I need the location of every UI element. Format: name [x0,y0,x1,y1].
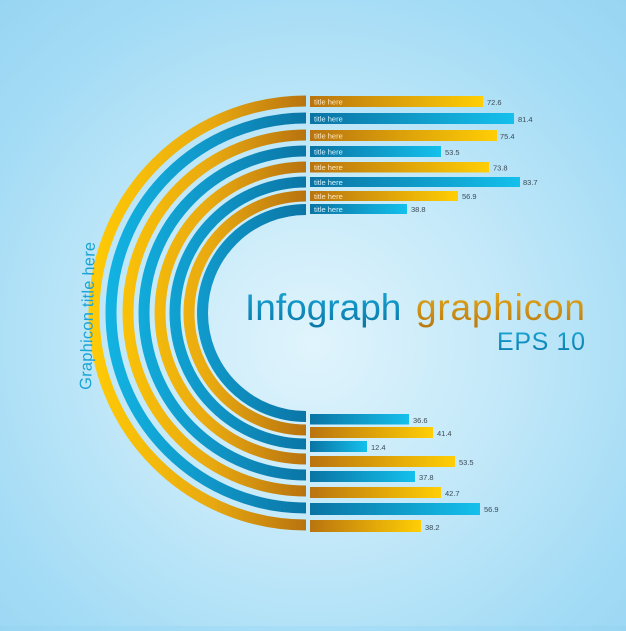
top bar chart: 53.5 [445,148,460,157]
bottom bar chart: 37.8 [419,473,434,482]
top bar chart: 73.8 [493,164,508,172]
C-shaped arcs [94,101,306,525]
bottom bar chart: 41.4 [437,429,452,438]
bottom bar chart: 36.6 [413,416,428,425]
top bar chart: title here [314,132,343,140]
top bar chart: 38.8 [411,205,426,214]
bottom bar chart: 42.7 [445,489,460,498]
top bar chart: title here [314,192,343,201]
bottom bar chart [310,414,499,532]
bottom bar chart: 53.5 [459,458,474,467]
bottom bar chart: 12.4 [371,443,386,452]
top bar chart: title here [314,205,343,214]
top bar chart: title here [314,163,343,172]
main title [245,287,585,328]
top bar chart [310,96,538,214]
side title: Graphicon title here [77,242,99,390]
top bar chart: title here [314,148,343,156]
top bar chart: 56.9 [462,192,477,201]
top bar chart: 75.4 [500,132,515,141]
top bar chart: 81.4 [518,115,533,124]
bottom bar chart: 56.9 [484,505,499,514]
top bar chart: title here [314,178,343,187]
bottom bar chart: 38.2 [425,523,440,532]
subtitle EPS 10: EPS 10 [497,328,585,356]
top bar chart: 72.6 [487,98,502,107]
main title: Infograph [245,287,401,328]
top bar chart: 83.7 [523,178,538,187]
top bar chart: title here [314,98,343,106]
main title: graphicon [416,287,585,328]
top bar chart: title here [314,114,343,124]
